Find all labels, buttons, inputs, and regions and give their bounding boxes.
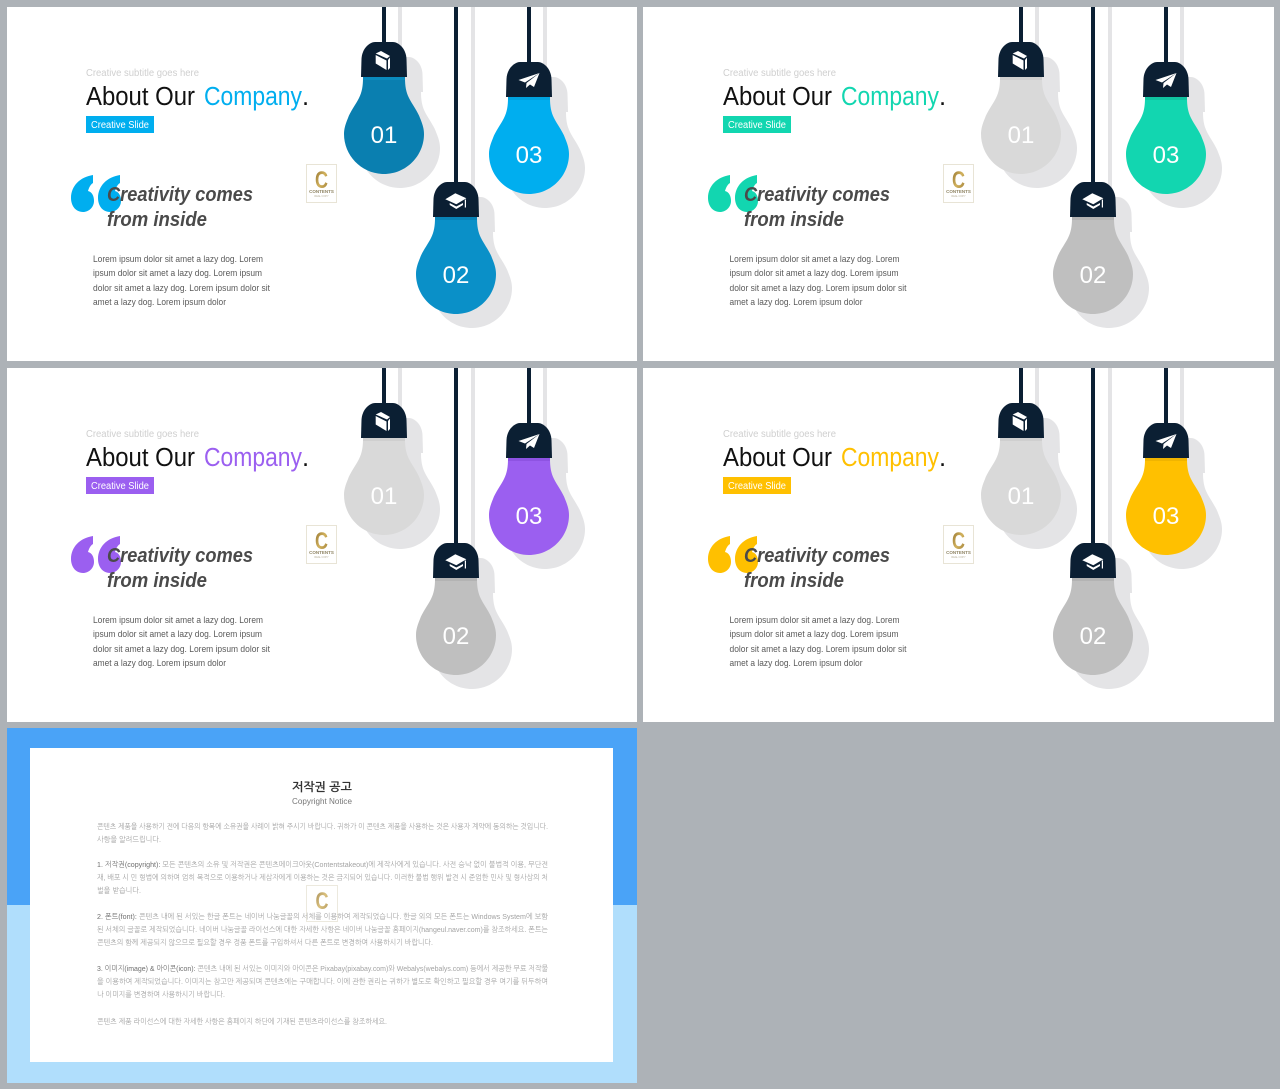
closing line: 콘텐츠 제품 라이선스에 대한 자세한 사항은 홈페이지 하단에 기재된 콘텐츠라이선스를 참조하세요. [97,1017,387,1026]
paragraph 3 image: 을 이용하여 제작되었습니다. 이미지는 참고만 제공되며 콘텐츠에는 구매합니다. 이에 관한 권리는 귀하가 별도로 확인하고 필요할 경우 여기를 뒤두하여 [97,977,548,986]
logo: C [315,167,328,194]
paragraph 2 font: 된 서체의 글꼴로 제작되었습니다. 네이버 나눔글꼴 라이선스에 대한 자세한 사항은 네이버 나눔글꼴 홈페이지(hangeul.naver.com)를 참조하세요. 폰트는 [97,925,548,934]
title: . [939,83,946,111]
bulb 03: 03 [1153,142,1179,169]
bulb 03 [1126,7,1206,194]
bulb 02: 02 [443,262,469,289]
bulb 03: 03 [516,503,542,530]
icon: quote mark [71,175,121,212]
tag: Creative Slide [728,120,786,131]
title: About Our [86,83,195,111]
tag: Creative Slide [728,481,786,492]
logo: REAL COPY [951,556,966,559]
intro paragraph: 사항을 알려드립니다. [97,835,161,844]
bulb shadows [997,7,1222,328]
bulb shadows [360,368,585,689]
icon: quote mark [71,536,121,573]
bulb 01 [981,368,1061,535]
body text [730,615,907,669]
intro paragraph: 콘텐츠 제품을 사용하기 전에 다음의 항목에 소유권을 사례이 밝혀 주시기 바랍니다. 귀하가 이 콘텐츠 제품을 사용하는 것은 사용자 계약에 동의하는 것입니다. [97,822,548,831]
logo: REAL COPY [314,556,329,559]
body text: amet a lazy dog. Lorem ipsum dolor [93,297,226,308]
panel: copyright notice [7,728,637,1083]
title: About Our [86,444,195,472]
subtitle: Creative subtitle goes here [86,68,199,79]
logo [306,886,338,922]
paragraph 3 image: 3. 이미지(image) & 아이콘(icon): 콘텐츠 내에 된 서있는 이미지와 아이콘은 Pixabay(pixabay.com)와 Webalys(webalys.com) 등에서 제공한 무료 저작물 [97,964,548,973]
paragraph 2 font: 2. 폰트(font): 콘텐츠 내에 된 서있는 한글 폰트는 네이버 나눔글꼴의 서체를 이용하여 제작되었습니다. 한글 외의 모든 폰트는 Windows System에 보함 [97,912,549,921]
paragraph 1 copyright: 재, 배포 시 민 형법에 의하여 엄히 목적으로 이용하거나 제삼자에게 이용하는 것은 금지되어 있습니다. 이러한 불법 행위 발견 시 준엄한 민사 및 형사상의 처 [97,873,548,882]
body text [730,254,907,308]
tag [723,116,791,133]
bulb 01 [344,368,424,535]
bulb 03: 03 [516,142,542,169]
bulb shadows [997,368,1222,689]
quote text: Creativity comes [744,183,890,206]
body text [93,615,270,669]
bulb 01: 01 [1008,483,1034,510]
body text: amet a lazy dog. Lorem ipsum dolor [730,658,862,669]
body text: Lorem ipsum dolor sit amet a lazy dog. Lorem [730,254,900,265]
body text: ipsum dolor sit amet a lazy dog. Lorem ipsum [730,268,899,279]
panel: blue slide [7,7,637,361]
quote text [744,183,890,231]
title [86,83,309,111]
subtitle: Creative subtitle goes here [86,429,199,440]
logo [306,526,336,564]
paragraph 1 copyright: 1. 저작권(copyright): 모든 콘텐츠의 소유 및 저작권은 콘텐츠메이크아웃(Contentstakeout)에 제작사에게 있습니다. 사전 승낙 없이 불법적 이용, 무단전 [97,860,548,869]
logo [306,164,336,202]
body text: amet a lazy dog. Lorem ipsum dolor [93,658,226,669]
paragraph 2 font: 콘텐츠의 함께 제공되지 않으므로 필요할 경우 정품 폰트를 구입하셔서 다른 폰트로 변경하여 사용하시기 바랍니다. [97,938,433,947]
quote text: from inside [744,569,844,592]
bulb 01: 01 [371,122,397,149]
panel: yellow slide [643,368,1274,722]
bulb 02: 02 [443,623,469,650]
quote text: from inside [744,208,844,231]
body text: Lorem ipsum dolor sit amet a lazy dog. Lorem [730,615,900,626]
logo [944,164,974,202]
bulb 02 [1053,368,1133,675]
title: . [302,444,309,472]
notice subheading: Copyright Notice [292,796,352,806]
bulb 02 [1053,7,1133,314]
intro paragraph [97,822,548,844]
quote text: from inside [107,569,207,592]
body text: ipsum dolor sit amet a lazy dog. Lorem ipsum [93,268,262,279]
logo: C [952,167,965,194]
bulb 02: 02 [1080,623,1106,650]
logo: CONTENTS [946,550,971,555]
title: About Our [723,444,832,472]
title: . [302,83,309,111]
logo: REAL COPY [314,195,329,198]
title: Company [204,444,302,472]
title [86,444,309,472]
body text: ipsum dolor sit amet a lazy dog. Lorem ipsum [730,629,899,640]
quote text [744,544,890,592]
tag: Creative Slide [91,120,149,131]
body text [93,254,270,308]
bulb 01: 01 [371,483,397,510]
logo: CONTENTS [309,550,334,555]
bulb 01 [344,7,424,174]
body text: Lorem ipsum dolor sit amet a lazy dog. Lorem [93,615,263,626]
quote text: Creativity comes [107,183,253,206]
bulb 03 [1126,368,1206,555]
title [723,444,946,472]
logo: CONTENTS [946,189,971,194]
quote text [107,183,253,231]
title: Company [204,83,302,111]
body text: dolor sit amet a lazy dog. Lorem ipsum dolor sit [730,644,907,655]
paragraph 3 image [97,964,548,999]
bulb 02: 02 [1080,262,1106,289]
tag [86,477,154,494]
tag: Creative Slide [91,481,149,492]
bulb 03 [489,368,569,555]
paragraph 1 copyright [97,860,548,895]
title: . [939,444,946,472]
panel: teal slide [643,7,1274,361]
paragraph 2 font [97,912,549,947]
logo: C [315,528,328,555]
panel: purple slide [7,368,637,722]
logo: C [316,888,328,915]
body text: Lorem ipsum dolor sit amet a lazy dog. Lorem [93,254,263,265]
quote text: Creativity comes [107,544,253,567]
tag [86,116,154,133]
body text: dolor sit amet a lazy dog. Lorem ipsum dolor sit [93,644,270,655]
bulb 01 [981,7,1061,174]
subtitle: Creative subtitle goes here [723,429,836,440]
logo: CONTENTS [309,189,334,194]
quote text [107,544,253,592]
body text: dolor sit amet a lazy dog. Lorem ipsum dolor sit [730,283,907,294]
bulb 01: 01 [1008,122,1034,149]
paragraph 1 copyright: 벌을 받습니다. [97,886,141,895]
icon: quote mark [708,175,758,212]
icon: quote mark [708,536,758,573]
body text: dolor sit amet a lazy dog. Lorem ipsum dolor sit [93,283,270,294]
paragraph 3 image: 나 이미지를 변경하여 사용하시기 바랍니다. [97,990,225,999]
subtitle: Creative subtitle goes here [723,68,836,79]
bulb 02 [416,368,496,675]
bulb shadows [360,7,585,328]
title: About Our [723,83,832,111]
quote text: Creativity comes [744,544,890,567]
title [723,83,946,111]
title: Company [841,83,939,111]
body text: amet a lazy dog. Lorem ipsum dolor [730,297,862,308]
logo: REAL COPY [951,195,966,198]
logo: C [952,528,965,555]
title: Company [841,444,939,472]
quote text: from inside [107,208,207,231]
bulb 03 [489,7,569,194]
notice heading: 저작권 공고 [292,780,353,794]
tag [723,477,791,494]
body text: ipsum dolor sit amet a lazy dog. Lorem ipsum [93,629,262,640]
bulb 03: 03 [1153,503,1179,530]
logo [944,526,974,564]
bulb 02 [416,7,496,314]
